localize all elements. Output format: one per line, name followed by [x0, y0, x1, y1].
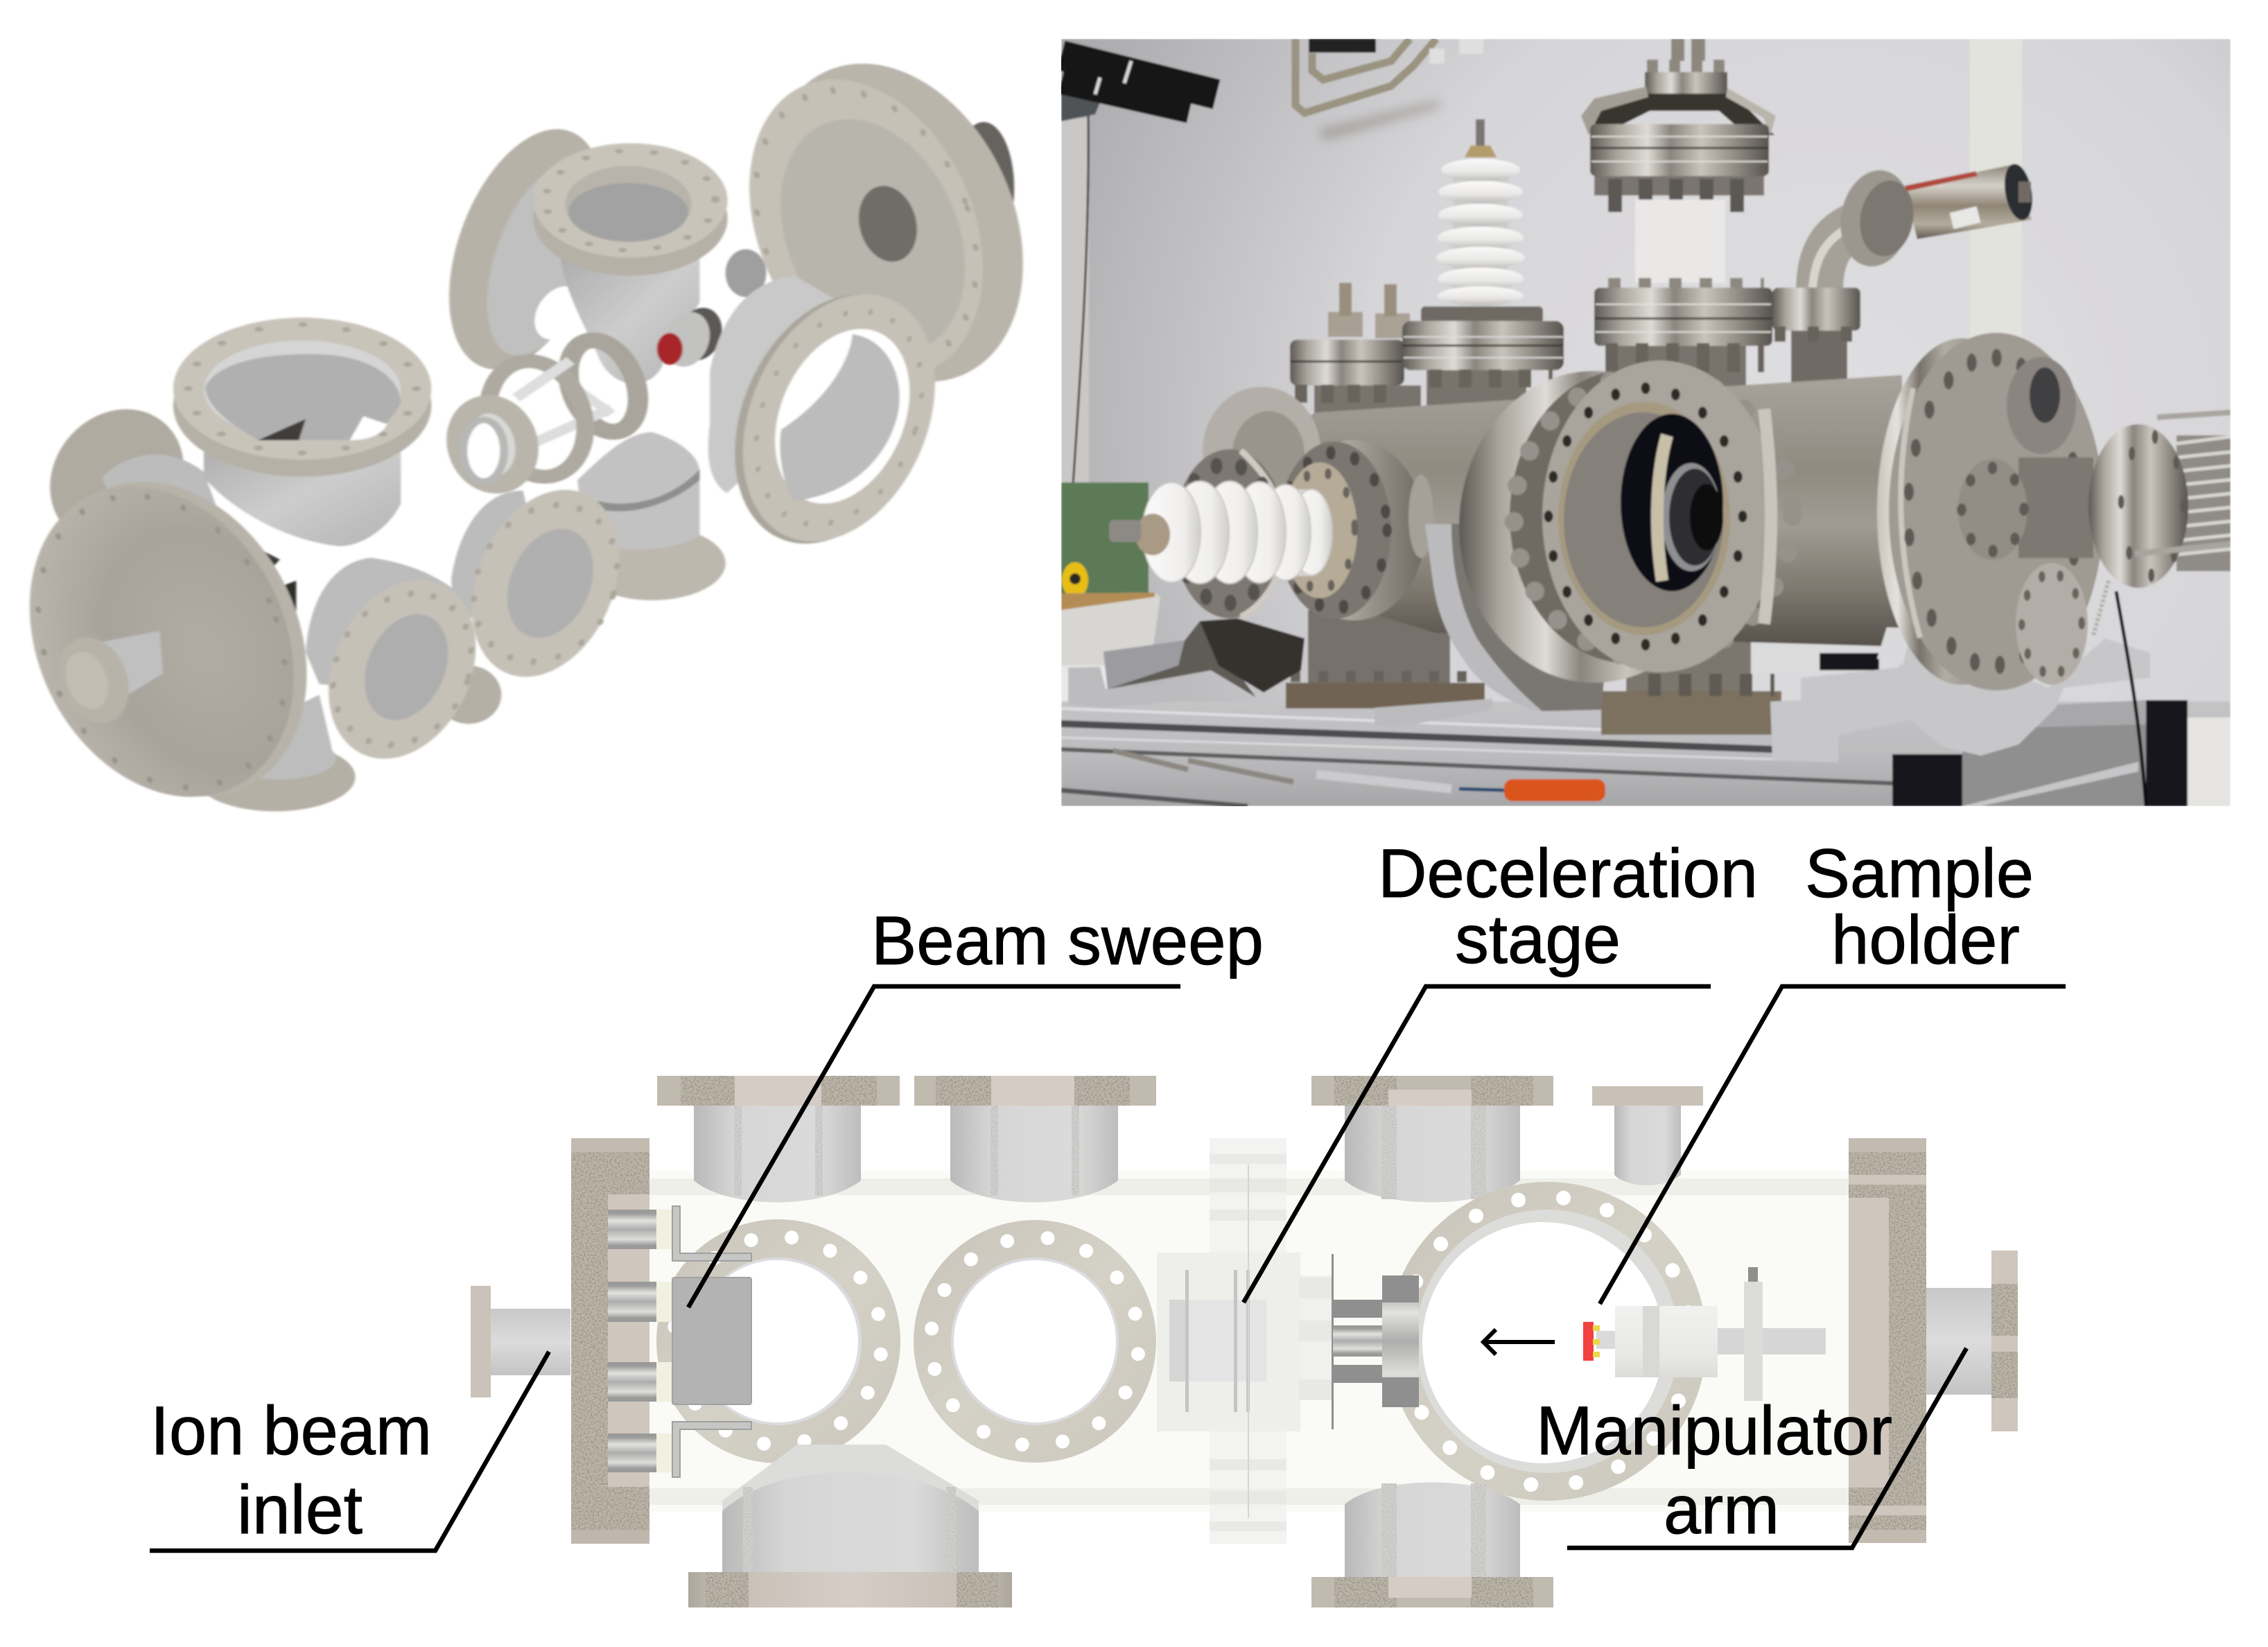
black feet [1892, 700, 2188, 806]
dark bracket wedges [227, 533, 296, 644]
tools on bench [1113, 751, 1605, 801]
label: sample holder [1600, 835, 2066, 1304]
panel: exploded CAD view of the chamber [0, 42, 1063, 819]
small port neck [1791, 326, 1847, 385]
far flange behind insulator [1174, 387, 1320, 618]
standoffs [608, 1210, 672, 1472]
insulator mounting flange [1277, 440, 1433, 620]
side port ring 2 [914, 1220, 1156, 1463]
label: manipulator arm: arm [1664, 1471, 1779, 1548]
white ceramic tube [1635, 200, 1725, 283]
block on bench [1375, 699, 1492, 727]
lower flange stack on tall column [1594, 283, 1772, 358]
shiny outer front flange [1459, 371, 1729, 683]
label: deceleration stage: Deceleration [1378, 835, 1758, 912]
panel: cross-section diagram [150, 835, 2066, 1607]
feedthrough pins [1328, 283, 1410, 338]
top port necks [1314, 343, 1746, 427]
top port 3 [1311, 1076, 1553, 1202]
bellows and linear flange [2088, 412, 2231, 588]
sample holder and manipulator [1583, 1267, 1826, 1401]
large rear end flange [713, 42, 1063, 403]
top flange stack on tall column [1581, 39, 1776, 195]
radiation sign [1062, 562, 1088, 598]
left top port with flange [173, 317, 431, 546]
wall labels [1429, 39, 1483, 64]
label: ion beam inlet: inlet [237, 1471, 363, 1548]
top port 4 small [1592, 1086, 1703, 1185]
large front end cap with inlet [0, 460, 347, 819]
cable on wall [1073, 114, 1088, 485]
middle port with flange [448, 478, 643, 689]
wall plumbing shadow [1320, 101, 1440, 140]
right end flange [1849, 1138, 2018, 1543]
label: sample holder: Sample [1805, 835, 2034, 912]
label: ion beam inlet [150, 1352, 549, 1551]
bottom port 2 [1311, 1482, 1553, 1607]
bottom cup port [577, 432, 726, 600]
left end flange [571, 1138, 649, 1544]
left mounting block [1068, 621, 1256, 708]
elbow port with flange [704, 276, 966, 559]
top port flange [533, 143, 728, 276]
cardboard box [1061, 593, 1160, 707]
elbow tube and vacuum gauge [1772, 162, 2036, 334]
rear side port ring [421, 116, 631, 382]
label: manipulator arm [1536, 1348, 1966, 1548]
bottom left port [1200, 610, 1485, 708]
wall strip [1970, 39, 2021, 336]
label: manipulator arm: Manipulator [1536, 1392, 1892, 1469]
black cable [2116, 591, 2146, 806]
beam direction arrow [1483, 1330, 1555, 1354]
main vacuum tube body [1264, 375, 1902, 647]
main vacuum tube [649, 1171, 1849, 1512]
right mounting plate [1770, 627, 2150, 762]
label: ion beam inlet: Ion beam [150, 1392, 432, 1469]
chain [2093, 581, 2109, 636]
insulator flange stack [1402, 306, 1564, 378]
label: beam sweep: Beam sweep [871, 902, 1264, 979]
ion beam inlet tube [471, 1286, 570, 1397]
green cabinet [1061, 482, 1149, 597]
front side port with flange [306, 558, 501, 771]
black pipes [1061, 55, 1216, 121]
label: deceleration stage: stage [1455, 900, 1621, 977]
panel: photograph of the assembled chamber [1061, 39, 2231, 806]
lower port flange behind end cap [195, 695, 356, 811]
top port 2 [914, 1076, 1156, 1202]
bolted front flange [1510, 369, 1792, 663]
saddle support [1425, 523, 1605, 711]
horizontal insulator [1109, 481, 1332, 584]
bottom right port [1601, 641, 1879, 735]
lab wall [1061, 39, 2231, 703]
vertical insulator [1436, 119, 1525, 306]
deceleration stage exploded parts [452, 335, 649, 488]
front port flange with viewing aperture [1542, 360, 1778, 672]
deceleration stage [1157, 1138, 1419, 1544]
top cross body [560, 254, 699, 384]
right end flange [1877, 333, 2104, 690]
left flange stack [1290, 340, 1404, 394]
label: deceleration stage [1244, 835, 1758, 1302]
top port 1 [657, 1076, 900, 1202]
aluminium bench rails [1061, 700, 2231, 806]
front port ring 3 [1388, 1182, 1707, 1501]
left wall column [1061, 118, 1089, 485]
label: beam sweep [688, 902, 1264, 1307]
manipulator and red sample holder [657, 250, 766, 369]
bottom port 1 domed [688, 1445, 1012, 1607]
cabinet right [2188, 717, 2231, 806]
wall plumbing [1296, 39, 1436, 113]
side port ring 1 [656, 1219, 900, 1463]
label: sample holder: holder [1831, 901, 2020, 978]
left back side port [32, 398, 218, 557]
L brackets [672, 1206, 751, 1477]
beam sweep plate [672, 1278, 751, 1404]
